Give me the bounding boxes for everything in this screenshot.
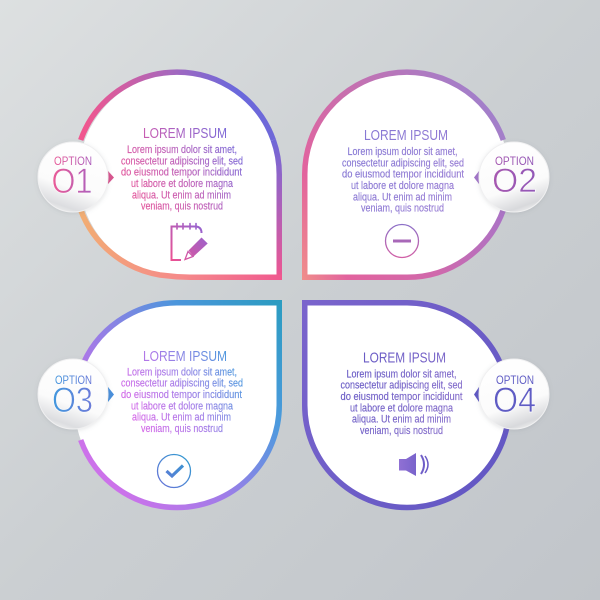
panel 02 heading: LOREM IPSUM	[364, 128, 448, 144]
option 04 badge	[479, 359, 549, 429]
panel: option 03	[38, 300, 282, 508]
option 03 badge: O3	[52, 381, 93, 420]
panel 02 body text	[342, 146, 464, 215]
panel 03 body text: Lorem ipsum dolor sit amet,	[127, 366, 237, 378]
icon: check circle	[158, 454, 190, 488]
panel: option 04	[305, 303, 549, 508]
pointer 03	[108, 387, 114, 402]
option 03 badge: OPTION	[55, 373, 92, 387]
panel 03 body text: aliqua. Ut enim ad minim	[132, 412, 231, 424]
panel 01 body text: Lorem ipsum dolor sit amet,	[127, 144, 237, 156]
option 01 badge	[38, 142, 108, 212]
panel 02 body text: Lorem ipsum dolor sit amet,	[348, 146, 458, 158]
pointer 01	[108, 171, 114, 184]
panel 04 body text	[340, 368, 462, 437]
option 02 badge: O2	[492, 162, 537, 200]
panel 01 body text: veniam, quis nostrud	[141, 201, 223, 213]
option 02 badge: OPTION	[495, 154, 534, 168]
panel 04 teardrop	[305, 303, 509, 508]
icon: notepad and pencil	[172, 224, 208, 260]
panel 04 body text: do eiusmod tempor incididunt	[340, 391, 462, 403]
option 03 badge	[38, 359, 108, 429]
panel 03 heading: LOREM IPSUM	[143, 349, 227, 365]
panel 02 body text: do eiusmod tempor incididunt	[342, 169, 464, 181]
panel 04 body text: veniam, quis nostrud	[360, 425, 443, 437]
panel 03 body text	[121, 366, 243, 435]
panel 04 body text: ut labore et dolore magna	[350, 402, 453, 414]
panel 02 body text: consectetur adipiscing elit, sed	[342, 157, 464, 169]
panel 01 body text: do eiusmod tempor incididunt	[121, 167, 242, 179]
option 02 badge	[479, 142, 549, 212]
panel 03 body text: do eiusmod tempor incididunt	[121, 389, 242, 401]
panel 03 body text: consectetur adipiscing elit, sed	[121, 378, 243, 390]
panel 02 teardrop	[302, 72, 509, 280]
panel 02 body text: aliqua. Ut enim ad minim	[353, 191, 452, 203]
option 04 badge: OPTION	[496, 373, 534, 387]
icon: minus circle	[386, 224, 418, 258]
option 01 badge: OPTION	[54, 154, 92, 168]
option 01 badge: O1	[52, 162, 92, 201]
panel 01 body text: aliqua. Ut enim ad minim	[132, 189, 231, 201]
panel: option 02	[302, 72, 549, 280]
panel 03 body text: ut labore et dolore magna	[131, 400, 233, 412]
panel 01 body text: ut labore et dolore magna	[131, 178, 233, 190]
panel 01 heading: LOREM IPSUM	[143, 126, 227, 142]
panel 04 body text: Lorem ipsum dolor sit amet,	[346, 368, 456, 380]
panel 02 body text: veniam, quis nostrud	[361, 203, 444, 215]
panel 01 teardrop	[79, 72, 282, 280]
panel 01 body text: consectetur adipiscing elit, sed	[121, 155, 243, 167]
panel 04 body text: aliqua. Ut enim ad minim	[352, 414, 451, 426]
panel 03 teardrop	[75, 300, 282, 508]
panel 04 heading: LOREM IPSUM	[363, 351, 446, 367]
panel: option 01	[38, 72, 282, 280]
pointer 02	[474, 171, 479, 184]
panel 02 body text: ut labore et dolore magna	[351, 180, 454, 192]
icon: speaker	[399, 453, 428, 476]
pointer 04	[474, 387, 479, 402]
panel 04 body text: consectetur adipiscing elit, sed	[340, 380, 462, 392]
panel 03 body text: veniam, quis nostrud	[141, 423, 223, 435]
option 04 badge: O4	[493, 381, 536, 420]
panel 01 body text	[121, 144, 243, 213]
